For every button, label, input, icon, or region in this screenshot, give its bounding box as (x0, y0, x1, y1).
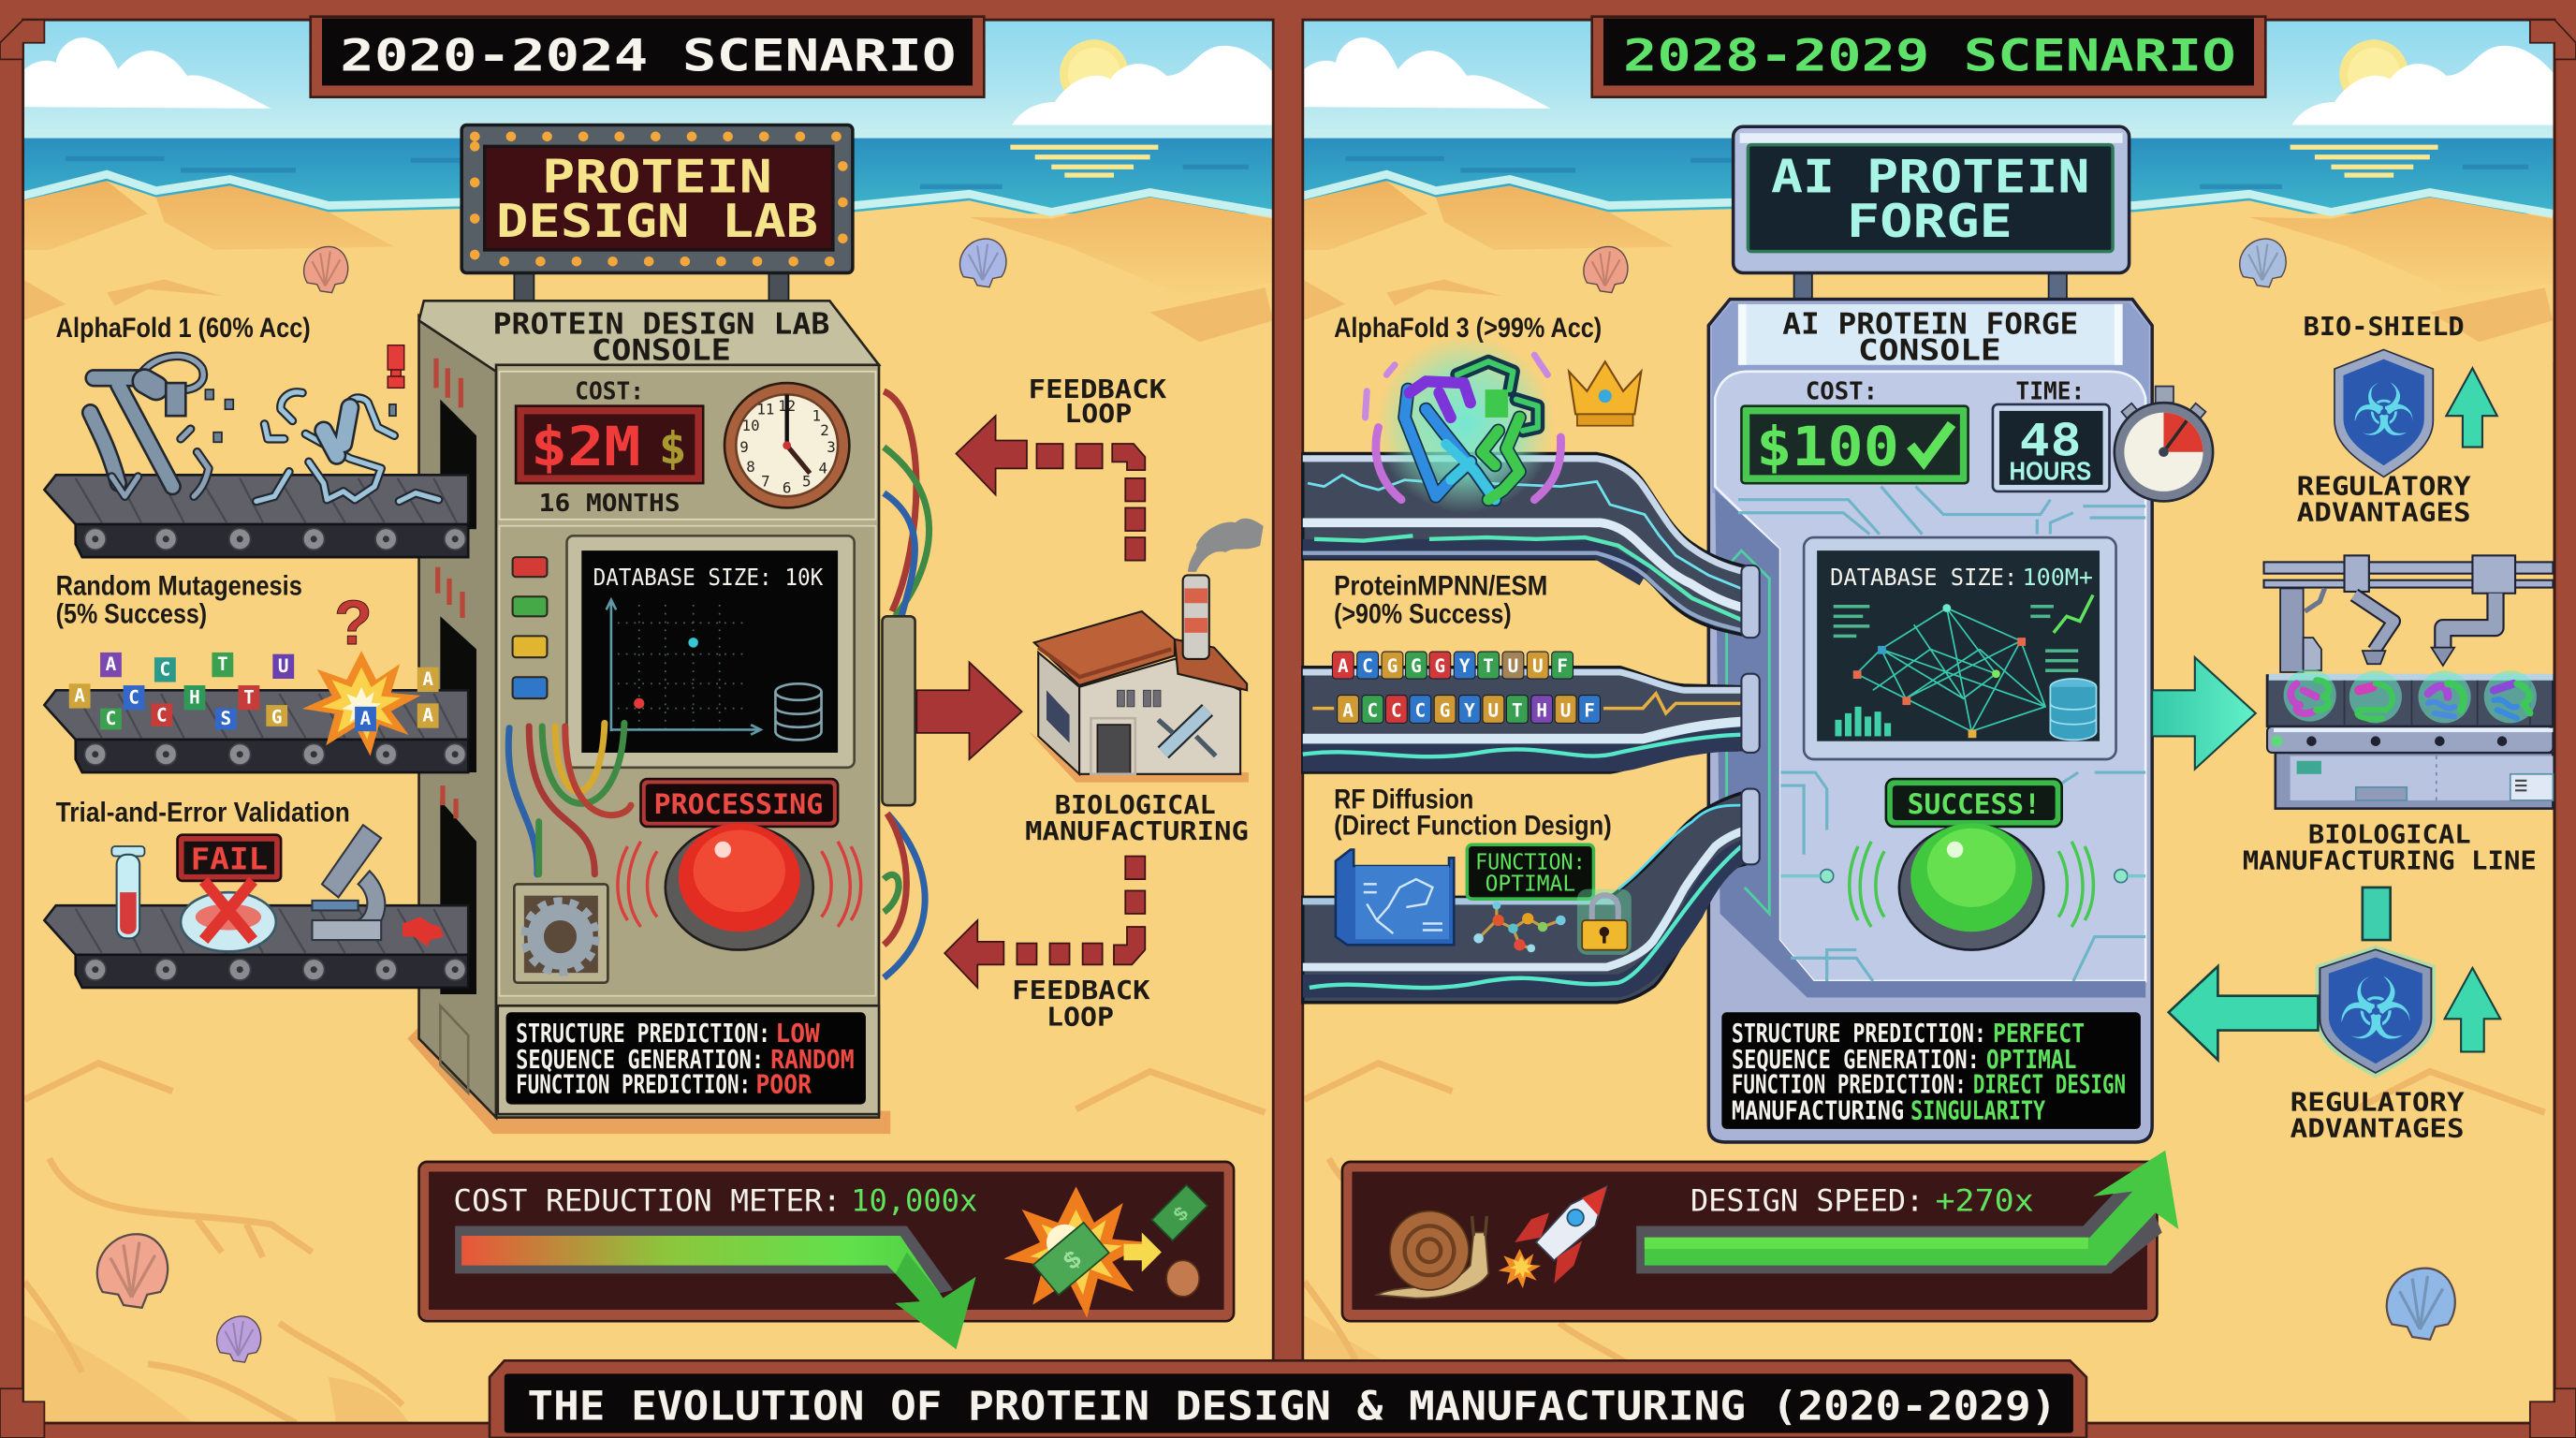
sequence tiles: U (1532, 655, 1544, 677)
icon: wall clock: 1 (812, 406, 821, 424)
big red button (618, 823, 861, 950)
label: RF Diffusion (1334, 785, 1612, 842)
amino acid tiles: A (422, 705, 433, 726)
sequence tiles: C (1414, 699, 1426, 721)
label: biological manufacturing line: BIOLOGICAL (2308, 821, 2471, 850)
icon: wall clock: 7 (761, 473, 770, 491)
sequence tiles: G (1435, 655, 1445, 677)
conveyor: random amino acid tiles (44, 589, 468, 772)
cost label: COST: (1806, 377, 1878, 405)
label: feedback loop bottom: FEEDBACK (1012, 976, 1150, 1005)
arrow: to manufacturing line (2152, 657, 2256, 770)
label: regulatory advantages: ADVANTAGES (2297, 499, 2471, 528)
status panel: DIRECT DESIGN (1973, 1070, 2126, 1099)
sequence tiles: C (1368, 699, 1378, 721)
meter: design speed: DESIGN SPEED: (1690, 1185, 1924, 1219)
machine console (419, 301, 915, 1118)
time label: TIME: (2016, 377, 2085, 405)
cost label: COST: (575, 377, 644, 405)
status panel: SINGULARITY (1910, 1096, 2046, 1125)
status panel: MANUFACTURING (1732, 1096, 1904, 1125)
meter: design speed (1342, 1151, 2178, 1321)
marquee sign: protein design lab: PROTEIN (542, 149, 772, 203)
protein: grey misfolded (91, 356, 439, 501)
label: processing (640, 779, 838, 827)
arrow: feedback loop top (956, 416, 1145, 561)
arrow: to biological manufacturing (916, 662, 1022, 759)
overhead rail (2264, 555, 2553, 594)
label: regulatory advantages lower (2291, 1089, 2465, 1144)
icon: exclamation mark (388, 345, 404, 388)
icon: stopwatch (2115, 387, 2213, 501)
pipe: bottom (1303, 792, 1747, 1003)
circuit traces (1738, 487, 2145, 981)
sequence tiles: Y (1459, 655, 1471, 677)
marquee sign: protein design lab: DESIGN LAB (496, 194, 818, 248)
status panel: FUNCTION PREDICTION: (1732, 1070, 1967, 1099)
sequence tiles: T (1483, 655, 1494, 677)
icon: wall clock: 3 (827, 438, 836, 456)
side connector box (882, 616, 915, 805)
sequence tiles: A (1338, 655, 1349, 677)
status panel: SEQUENCE GENERATION: (516, 1046, 764, 1075)
label: biological manufacturing (1025, 791, 1249, 846)
label: feedback loop top (1029, 375, 1167, 429)
icon: lower shield: ☣ (2337, 959, 2414, 1059)
manufacturing line (2264, 555, 2553, 809)
label: ProteinMPNN/ESM (1334, 570, 1547, 629)
robot arms (2280, 588, 2496, 672)
shell: large peach (97, 1234, 168, 1308)
amino acid tiles: A (360, 708, 372, 729)
sequence tiles: G (1440, 699, 1450, 721)
label: function optimal: FUNCTION: (1475, 851, 1586, 875)
amino acid tiles: U (278, 655, 289, 677)
label: AlphaFold 3: AlphaFold 3 (>99% Acc) (1334, 313, 1602, 344)
screen: database size 100M+ (1804, 537, 2116, 759)
panel: 2028-2029 scenario (1303, 17, 2553, 1340)
amino acid tiles: A (106, 653, 117, 675)
screen: database size 100M+: DATABASE SIZE: (1830, 564, 2017, 591)
status panel: RANDOM (770, 1046, 855, 1075)
label: Trial-and-Error Validation: Trial-and-Error Validation (56, 798, 350, 829)
shell: large blue (2387, 1269, 2455, 1340)
console title: CONSOLE (592, 334, 731, 368)
marquee sign: protein design lab (461, 125, 853, 304)
console recessed side (1715, 490, 2145, 997)
panel: 2020-2024 scenario (44, 17, 1264, 1362)
icon: exploding money: $ (1058, 1244, 1087, 1275)
wires: right side (884, 391, 929, 977)
icon: bio-shield (2334, 349, 2433, 477)
meter: cost reduction: 10,000x (851, 1185, 977, 1219)
meter: cost reduction (419, 1162, 1234, 1349)
status panel: SEQUENCE GENERATION: (1732, 1046, 1980, 1075)
footer title banner: THE EVOLUTION OF PROTEIN DESIGN & MANUFACTURING (2020-2029) (527, 1384, 2056, 1431)
label: success: SUCCESS! (1908, 788, 2041, 820)
label: RF Diffusion: (Direct Function Design) (1334, 811, 1612, 842)
heading plaque: 2028-2029 scenario: 2028-2029 SCENARIO (1623, 31, 2236, 82)
label: fail (178, 835, 281, 881)
status buttons (513, 557, 547, 698)
big green button (1781, 823, 2145, 950)
connector stem (2363, 888, 2391, 940)
label: bio-shield: BIO-SHIELD (2304, 313, 2465, 342)
label: feedback loop top: FEEDBACK (1029, 375, 1167, 404)
console title (1782, 307, 2078, 368)
label: regulatory advantages (2297, 472, 2471, 528)
label: regulatory advantages lower: REGULATORY (2291, 1089, 2465, 1118)
time display: 48 hours (1993, 404, 2110, 492)
label: biological manufacturing: MANUFACTURING (1025, 817, 1249, 846)
conduit pipes (1303, 454, 1748, 1003)
amino acid tiles: A (422, 668, 433, 690)
console title: PROTEIN DESIGN LAB (493, 307, 829, 341)
sequence tiles: F (1584, 699, 1595, 721)
icon: lower shield (2316, 946, 2436, 1078)
icon: wall clock: 9 (739, 438, 749, 456)
label: function optimal: OPTIMAL (1486, 872, 1575, 896)
time display: 48 hours: 48 (2019, 415, 2082, 466)
amino acid tiles: T (217, 653, 228, 675)
icon: explosion (302, 651, 420, 756)
heading plaque: 2020-2024 scenario (311, 17, 984, 97)
amino acid tiles: C (156, 705, 168, 726)
amino acid tiles (69, 653, 439, 731)
label: Random Mutagenesis: (5% Success) (56, 598, 207, 629)
base (2276, 753, 2553, 809)
label: fail: FAIL (191, 844, 268, 877)
status panel: LOW (775, 1020, 820, 1049)
console left side (419, 315, 496, 1118)
amino acid tiles: G (271, 706, 283, 727)
cost display: $100 (1741, 406, 1969, 483)
icon: wall clock: 8 (746, 458, 755, 476)
meter: design speed: +270x (1936, 1185, 2034, 1219)
shell: peach (304, 246, 348, 293)
label: regulatory advantages lower: ADVANTAGES (2291, 1115, 2465, 1144)
sign: AI protein forge (1734, 126, 2130, 304)
internal wires (508, 723, 631, 874)
icon: rocket (1499, 1186, 1606, 1288)
icon: wall clock (724, 383, 849, 507)
icon: bio-shield: ☣ (2351, 369, 2416, 453)
shell: blue (2240, 239, 2286, 287)
label: biological manufacturing: BIOLOGICAL (1055, 791, 1216, 820)
sequence tiles: U (1488, 699, 1499, 721)
label: function optimal (1467, 844, 1593, 899)
amino acid tiles: C (128, 686, 139, 708)
icon: wall clock: 5 (802, 473, 812, 491)
console top (419, 301, 879, 372)
label: AlphaFold 1: AlphaFold 1 (60% Acc) (56, 313, 311, 344)
cost display: $2M: $ (659, 423, 687, 475)
pipe: middle (1303, 668, 1748, 772)
conveyor: broken protein structure (44, 345, 468, 557)
pipe collars (1741, 565, 1760, 864)
sequence tiles: G (1411, 655, 1422, 677)
icon: glowing protein structure (1365, 335, 1561, 513)
gear box (514, 884, 607, 983)
icon: wall clock: 10 (742, 417, 760, 434)
icon: crown (1569, 361, 1641, 426)
amino acid tiles: C (160, 658, 170, 680)
shell: purple (217, 1316, 261, 1362)
icon: wall clock: 12 (778, 397, 796, 415)
shell: peach (1584, 246, 1628, 293)
amino acid tiles: S (221, 708, 231, 729)
icon: snail (1377, 1211, 1488, 1299)
icon: blueprint (1336, 850, 1454, 945)
status panel: STRUCTURE PREDICTION: (1732, 1020, 1986, 1049)
cost display: $100: $100 (1756, 415, 1899, 478)
label: biological manufacturing line: MANUFACTURING LINE (2243, 847, 2537, 876)
icon: factory (1029, 519, 1264, 783)
label: ProteinMPNN/ESM: ProteinMPNN/ESM (1334, 570, 1547, 601)
status panel (1721, 1012, 2141, 1129)
sequence tiles (1332, 652, 1600, 723)
icon: wall clock: 4 (819, 460, 827, 477)
panel background: right beach scene (1303, 20, 2553, 1427)
sequence tiles: C (1362, 655, 1373, 677)
console shadow on sand (407, 1027, 890, 1134)
label: processing: PROCESSING (654, 788, 823, 820)
icon: exploding money: $ (1169, 1203, 1193, 1225)
label: Random Mutagenesis (56, 570, 302, 629)
duration label: 16 MONTHS (539, 489, 681, 517)
amino acid tiles: C (106, 708, 116, 729)
heading plaque: 2020-2024 scenario: 2020-2024 SCENARIO (340, 31, 956, 82)
label: regulatory advantages: REGULATORY (2297, 472, 2471, 501)
console title: CONSOLE (1858, 334, 2001, 368)
sequence tiles: T (1512, 699, 1523, 721)
amino acid tiles: A (74, 685, 85, 707)
icon: wall clock: 2 (820, 421, 829, 439)
icon: exploding money (1003, 1185, 1208, 1318)
label: ProteinMPNN/ESM: (>90% Success) (1334, 598, 1512, 629)
amino acid tiles: H (189, 686, 200, 708)
status panel: POOR (755, 1070, 812, 1099)
label: RF Diffusion: RF Diffusion (1334, 785, 1473, 815)
console top cap (1712, 302, 2149, 493)
label: Random Mutagenesis: Random Mutagenesis (56, 570, 302, 601)
icon: petri dish with red x (181, 881, 276, 951)
label: success (1886, 779, 2062, 827)
sequence tiles: G (1387, 655, 1398, 677)
heading plaque: 2028-2029 scenario (1592, 17, 2265, 97)
label: biological manufacturing line (2243, 821, 2537, 876)
status panel: FUNCTION PREDICTION: (516, 1070, 751, 1099)
sequence tiles: Y (1464, 699, 1475, 721)
icon: wall clock: 11 (756, 400, 774, 418)
meter: cost reduction: COST REDUCTION METER: (453, 1185, 842, 1219)
pipe: top (1303, 454, 1748, 636)
icon: microscope (312, 825, 385, 940)
sign: AI protein forge: FORGE (1847, 194, 2012, 248)
cost display: $2M (516, 406, 703, 483)
footer title banner (490, 1360, 2086, 1438)
status panel (498, 1005, 879, 1114)
status panel: STRUCTURE PREDICTION: (516, 1020, 770, 1049)
console front panel (1715, 372, 2145, 981)
arrow: up (2446, 368, 2497, 448)
conveyor: failed validation (44, 825, 468, 988)
sequence tiles: H (1536, 699, 1547, 721)
icon: padlock (1577, 889, 1632, 955)
console title (493, 307, 829, 368)
icon: test tube (111, 846, 144, 938)
shell: blue (959, 239, 1006, 287)
status panel: OPTIMAL (1986, 1046, 2076, 1075)
sequence tiles: A (1342, 699, 1354, 721)
icon: wall clock: 6 (783, 479, 791, 497)
amino acid tiles: T (243, 686, 255, 708)
sequence tiles: U (1560, 699, 1571, 721)
belt (2267, 675, 2553, 726)
sequence tiles: F (1557, 655, 1568, 677)
arrow: feedback loop bottom (944, 857, 1145, 988)
label: feedback loop bottom (1012, 976, 1150, 1032)
screen: database size 10K (567, 536, 855, 768)
icon: red splatter (402, 917, 444, 946)
console front (496, 365, 879, 1118)
console title: AI PROTEIN FORGE (1782, 307, 2078, 341)
panel background: left beach scene (23, 20, 1273, 1427)
label: feedback loop bottom: LOOP (1046, 1003, 1114, 1032)
screen: database size 100M+: 100M+ (2023, 564, 2093, 591)
cost display: $2M: $2M (531, 415, 640, 478)
time display: 48 hours: HOURS (2009, 457, 2091, 486)
sequence tiles: U (1508, 655, 1518, 677)
status panel: PERFECT (1993, 1020, 2085, 1049)
sign: AI protein forge: AI PROTEIN (1771, 149, 2089, 203)
icon: question mark: ? (334, 589, 373, 658)
sequence tiles: C (1391, 699, 1402, 721)
machine console (1708, 300, 2152, 1142)
icon: molecule (1473, 902, 1566, 952)
arrow: left to console (2169, 966, 2318, 1060)
folded proteins (2284, 668, 2537, 723)
label: feedback loop top: LOOP (1064, 400, 1132, 429)
arrow: up (2445, 968, 2500, 1051)
screen: database size 10K: DATABASE SIZE: 10K (593, 564, 823, 591)
